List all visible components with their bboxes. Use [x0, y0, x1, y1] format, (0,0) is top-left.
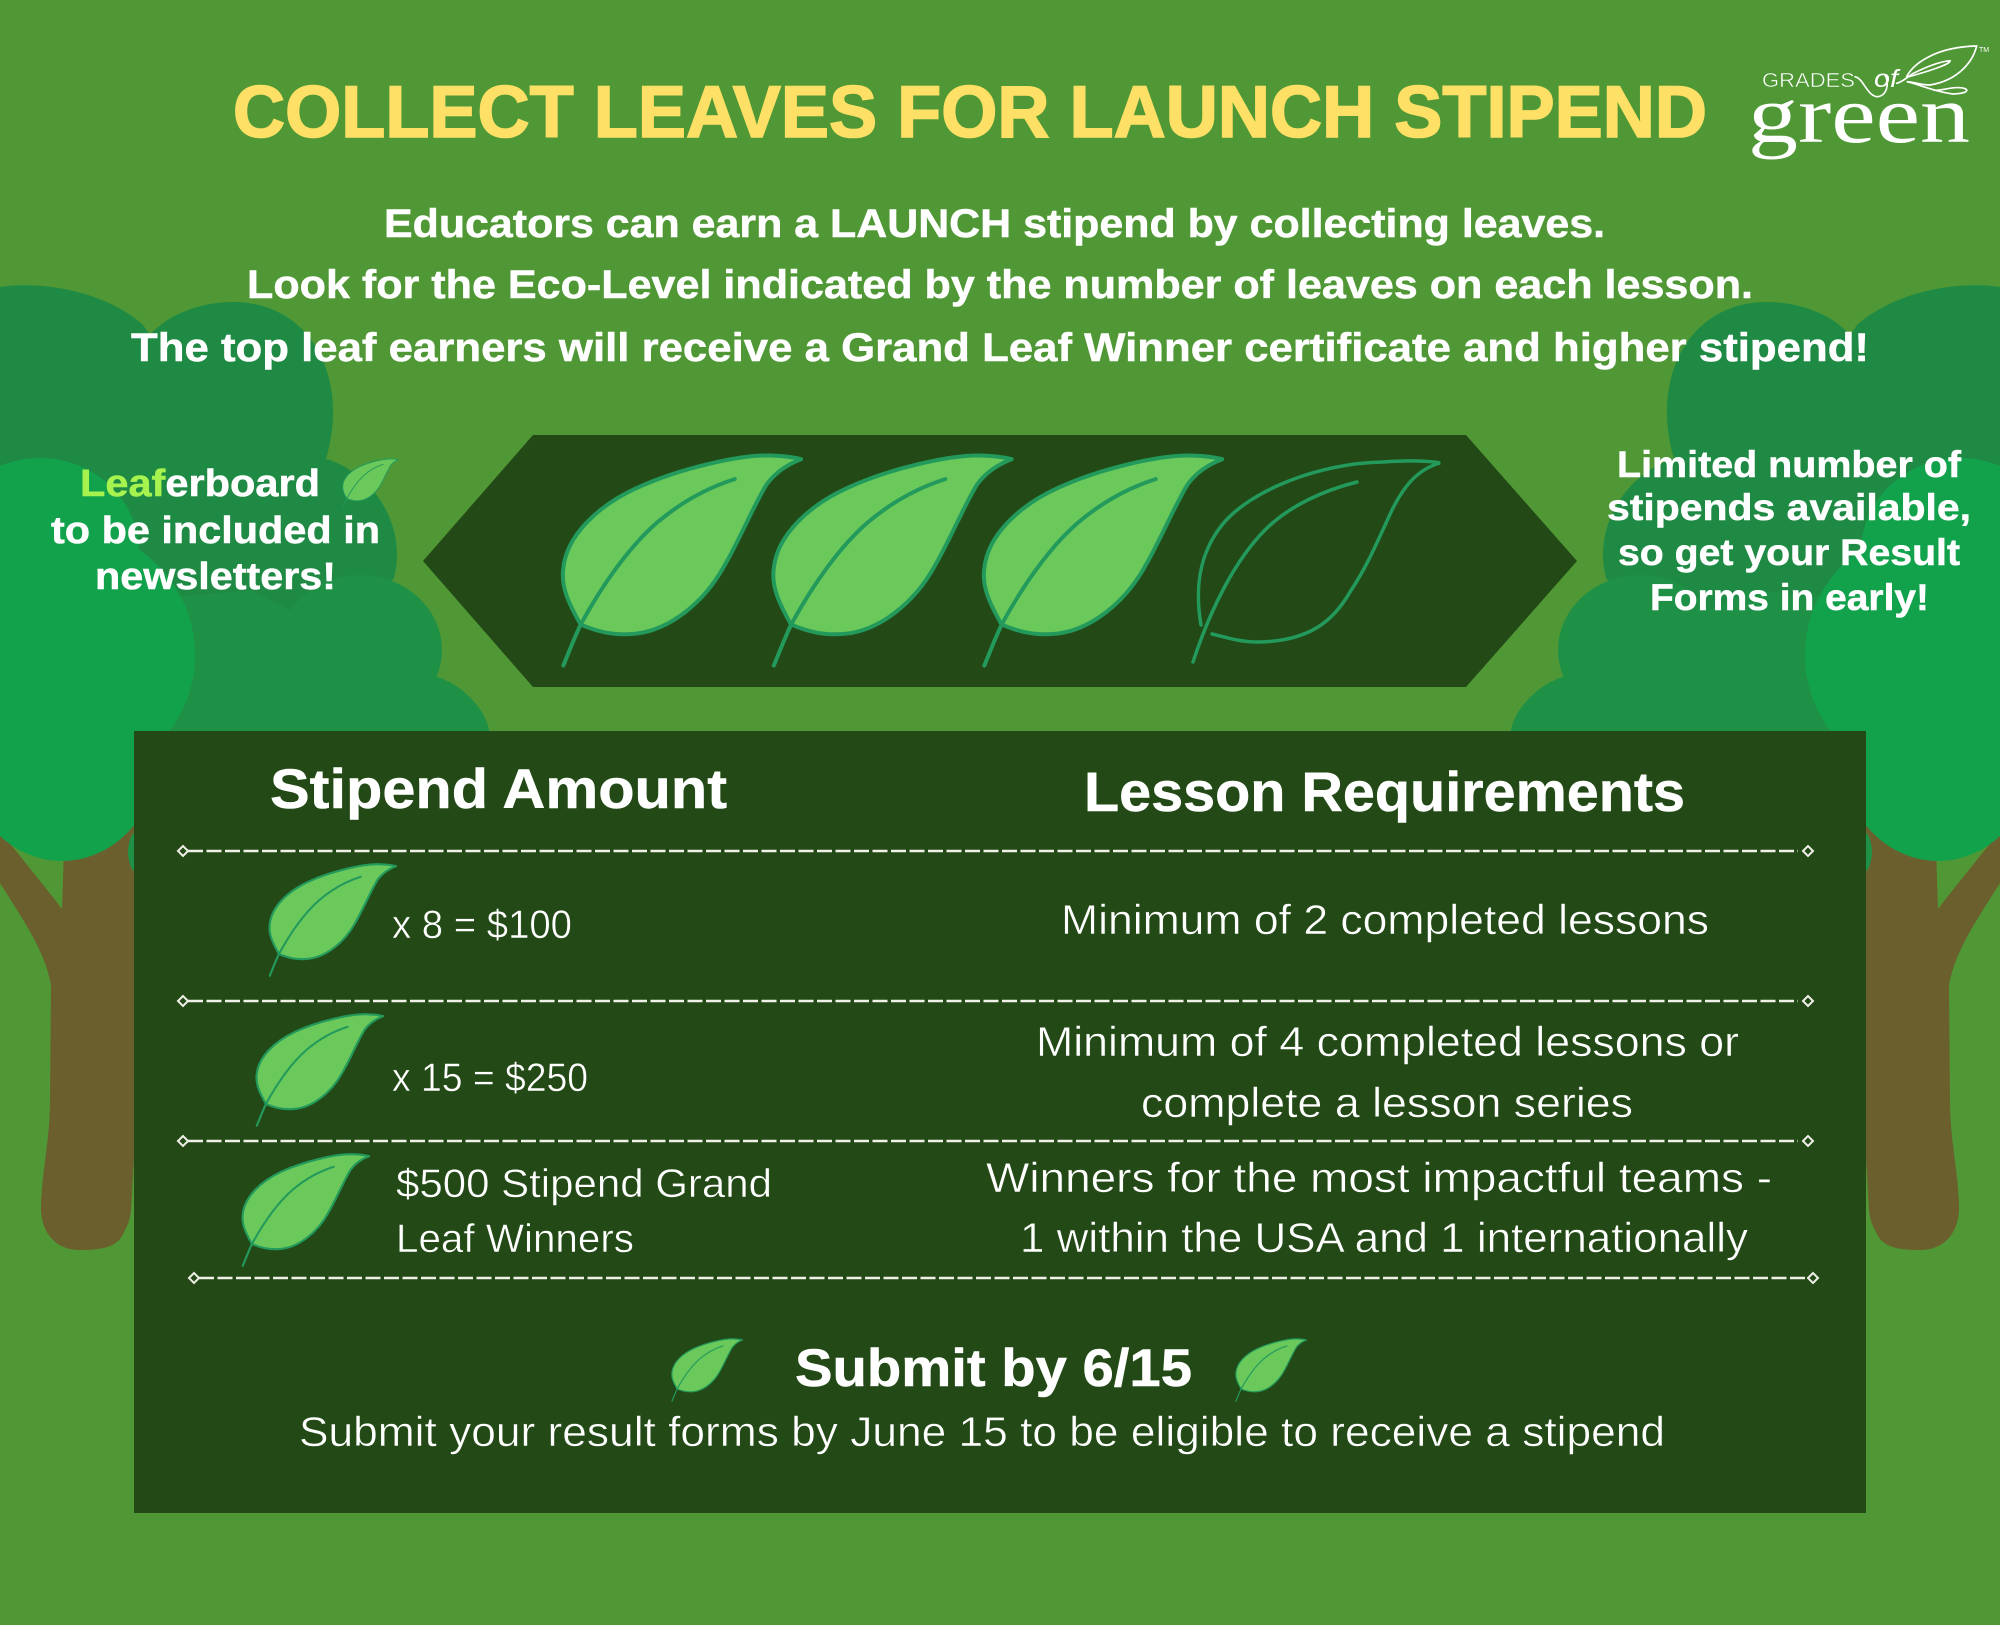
logo: Grades of Green: of	[1874, 65, 1902, 93]
callout: Leaferboard	[51, 463, 380, 598]
intro text: Educators can earn a LAUNCH stipend by collecting leaves.	[384, 202, 1605, 246]
row 3: stipend: Leaf Winners	[396, 1217, 634, 1261]
icon: outline leaf	[1193, 461, 1440, 662]
title: COLLECT LEAVES FOR LAUNCH STIPEND	[233, 72, 1707, 153]
row 2: requirement	[1036, 1018, 1739, 1126]
row 3: stipend: $500 Stipend Grand	[396, 1162, 772, 1206]
logo: Grades of Green: GRADES	[1762, 70, 1855, 92]
intro text: Look for the Eco-Level indicated by the number of leaves on each lesson.	[247, 263, 1753, 307]
icon: small leaf by Leaferboard	[343, 459, 399, 508]
icon: filled leaf 3	[984, 455, 1222, 666]
callout: Leaferboard: Leaferboard	[80, 463, 320, 505]
submit description: Submit your result forms by June 15 to be eligible to receive a stipend	[299, 1408, 1665, 1455]
logo: Grades of Green: green	[1748, 69, 1970, 160]
row 3: requirement	[986, 1154, 1772, 1261]
callout: limited stipends: Forms in early!	[1650, 577, 1929, 618]
row 1: stipend: x 8 = $100	[392, 903, 572, 947]
intro text	[131, 202, 1869, 370]
row 3: requirement: 1 within the USA and 1 internationally	[1020, 1214, 1748, 1261]
logo: Grades of Green	[1748, 46, 1989, 160]
row 3: leaf icon	[242, 1154, 369, 1266]
icon: filled leaf 2	[773, 455, 1012, 666]
icon: submit leaf left	[672, 1339, 743, 1401]
callout: Leaferboard: newsletters!	[95, 556, 336, 598]
row 2: stipend: x 15 = $250	[392, 1056, 588, 1100]
submit heading: Submit by 6/15	[795, 1339, 1192, 1398]
row 2: leaf icon	[256, 1014, 383, 1126]
icon: filled leaf 1	[563, 455, 801, 666]
illustration: left tree	[0, 285, 491, 1250]
row 2: requirement: Minimum of 4 completed lessons or	[1036, 1018, 1739, 1065]
row 1: leaf icon	[269, 864, 396, 976]
callout: limited stipends	[1607, 444, 1971, 618]
callout: limited stipends: so get your Result	[1618, 532, 1960, 573]
callout: limited stipends: Limited number of	[1617, 444, 1962, 485]
intro text: The top leaf earners will receive a Grand Leaf Winner certificate and higher stipend!	[131, 326, 1869, 370]
eco-level banner	[423, 435, 1577, 687]
illustration: right tree	[1509, 285, 2000, 1250]
column heading: Lesson Requirements: Lesson Requirements	[1084, 760, 1685, 823]
row 3: stipend	[396, 1162, 772, 1261]
callout: Leaferboard: to be included in	[51, 510, 380, 552]
row 1: requirement: Minimum of 2 completed lessons	[1061, 896, 1709, 943]
panel: stipend table	[134, 731, 1866, 1513]
callout: limited stipends: stipends available,	[1607, 487, 1971, 528]
logo: Grades of Green: TM	[1979, 47, 1989, 54]
icon: submit leaf right	[1236, 1339, 1307, 1401]
column heading: Stipend Amount: Stipend Amount	[270, 757, 727, 820]
row 3: requirement: Winners for the most impactful teams -	[986, 1154, 1772, 1201]
row 2: requirement: complete a lesson series	[1141, 1079, 1633, 1126]
